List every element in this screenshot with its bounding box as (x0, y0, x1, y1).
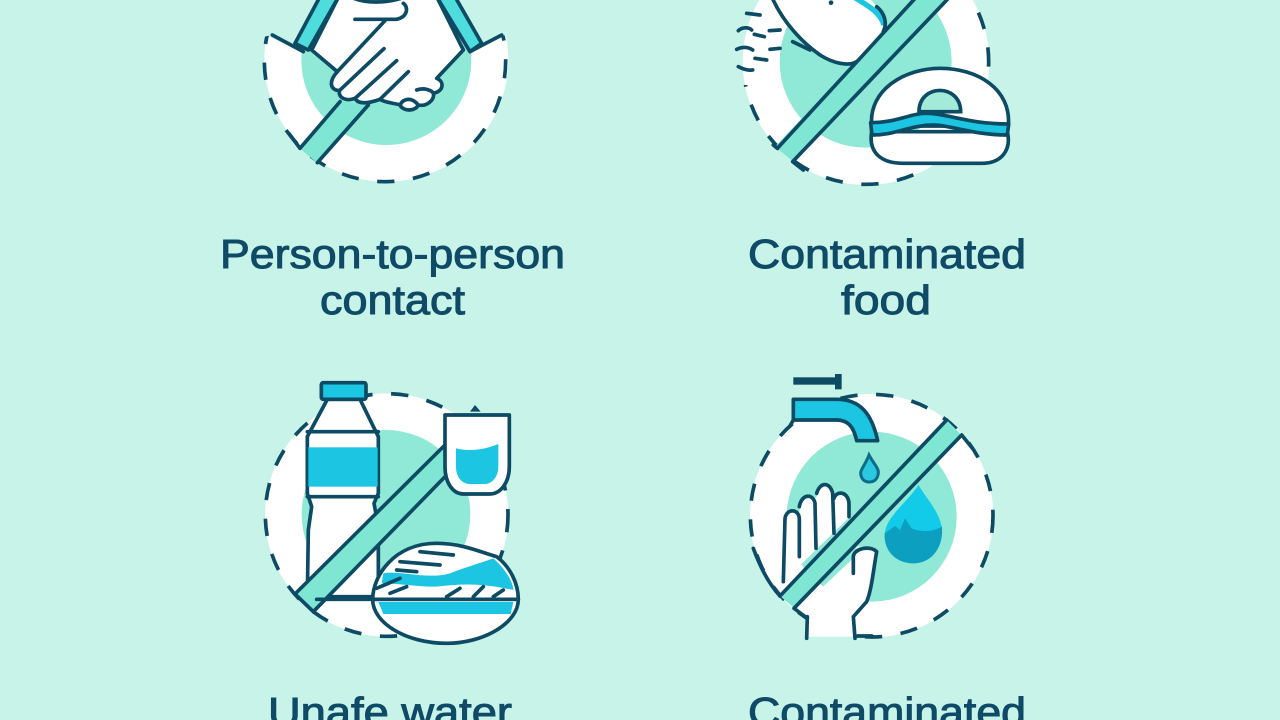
hand (753, 485, 877, 638)
small water drop (861, 455, 878, 482)
prohibition bar (295, 445, 447, 612)
infographic canvas (223, 0, 1024, 720)
prohibition bar (780, 420, 972, 618)
label: contaminated food (748, 231, 1026, 323)
cuffs (272, 0, 502, 52)
label: person-to-person contact: Person-to-person (220, 231, 565, 277)
white disc (750, 394, 993, 637)
label: contaminated food: Contaminated (748, 231, 1026, 277)
icon: no person-to-person contact (handshake) (264, 0, 508, 182)
icon: no contaminated water on hands (750, 374, 993, 638)
label: contaminated food: food (841, 277, 931, 323)
teal inner circle (780, 0, 952, 148)
teal inner circle (787, 432, 957, 602)
white disc (265, 393, 508, 637)
teal inner circle (302, 430, 470, 599)
white disc (264, 36, 508, 182)
icon: no unsafe water (265, 383, 518, 643)
teal inner circle (301, 45, 471, 145)
dashed ring (265, 394, 508, 636)
dashed ring (262, 35, 508, 184)
spray dashes (737, 13, 780, 70)
prohibition bar (773, 0, 950, 170)
prohibition bar (289, 102, 368, 163)
dashed ring (743, 0, 989, 184)
food bowl (317, 543, 518, 643)
water bottle (307, 383, 378, 597)
icon: no contaminated food (737, 0, 1009, 185)
clasped hands (312, 0, 463, 110)
hand with germs (772, 0, 887, 65)
faucet (790, 374, 878, 441)
label: person-to-person contact (220, 231, 565, 323)
large water drop (885, 485, 942, 563)
white disc (743, 0, 989, 185)
glass of water (445, 405, 509, 494)
burger (871, 68, 1009, 163)
dashed ring (750, 394, 993, 637)
label: person-to-person contact: contact (320, 277, 466, 323)
